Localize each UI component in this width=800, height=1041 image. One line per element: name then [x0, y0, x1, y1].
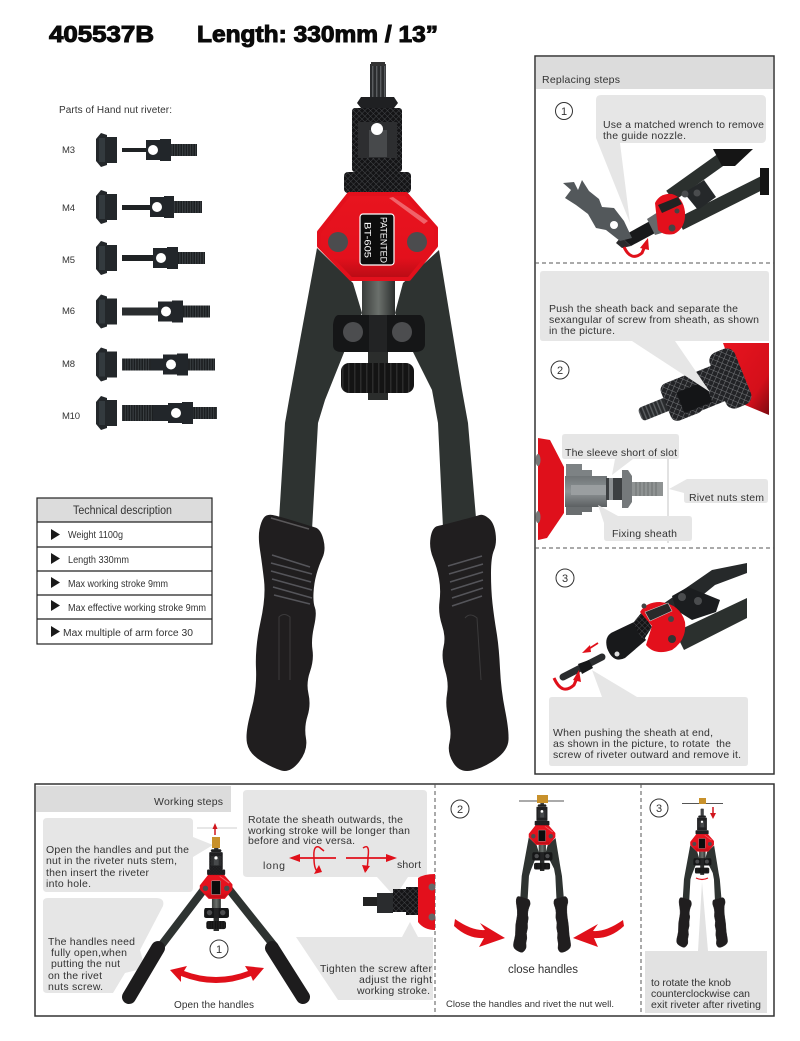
part: M6 — [62, 294, 210, 328]
callout: rotate the sheath: working stroke will be longer than — [247, 825, 410, 837]
callout: open the handles: then insert the riveter — [46, 867, 150, 879]
row: length — [51, 553, 129, 566]
callout: rotate the sheath: short — [397, 859, 421, 871]
illustration: step 3 tool and screw — [554, 563, 747, 689]
part: M4: M4 — [62, 203, 75, 214]
main tool: hand nut riveter: BT-605 — [362, 222, 372, 258]
row: length: Length 330mm — [68, 555, 129, 566]
arrow: short direction — [346, 847, 397, 873]
arrow: stroke line up — [197, 823, 237, 835]
callout: tighten the screw: working stroke. — [356, 985, 430, 997]
illustration: step 1 open riveter — [129, 837, 303, 997]
row: max working stroke: Max working stroke 9mm — [68, 579, 168, 590]
row: max effective working stroke — [51, 600, 206, 614]
illustration: step 2 closed riveter — [513, 795, 571, 952]
step 3 number — [556, 569, 574, 587]
heading: working steps: Working steps — [154, 796, 223, 808]
illustration: step 2 sheath close-up — [629, 343, 769, 443]
callout: tighten the screw — [296, 922, 433, 1000]
step 1 number: 1 — [561, 106, 567, 118]
callout: open the handles: into hole. — [46, 878, 91, 890]
step number 1: 1 — [216, 944, 222, 956]
title: Length: 330mm / 13” — [197, 21, 438, 47]
callout: handles need fully open: nuts screw. — [48, 981, 103, 993]
heading: replacing steps: Replacing steps — [542, 74, 620, 86]
row: max working stroke — [51, 577, 168, 590]
callout: step 3: as shown in the picture, to rotate the — [553, 738, 731, 750]
panel: technical description — [37, 498, 212, 644]
callout: step 3: screw of riveter outward and remove it. — [553, 749, 741, 761]
callout: step 3: When pushing the sheath at end, — [553, 727, 713, 739]
callout: rotate the knob: to rotate the knob — [651, 977, 731, 989]
part: M8 — [62, 348, 215, 382]
callout: step 3 — [549, 670, 748, 766]
main tool: hand nut riveter — [248, 62, 508, 770]
part: M8: M8 — [62, 359, 75, 370]
step 2 number: 2 — [557, 365, 563, 377]
illustration: step 3 riveter — [677, 798, 728, 947]
title: 405537B — [49, 21, 154, 47]
callout: step 2: in the picture. — [549, 325, 615, 337]
step 2 number — [551, 361, 569, 379]
callout: rivet nuts stem — [669, 479, 768, 504]
row: weight: Weight 1100g — [68, 530, 123, 541]
heading: working steps — [36, 786, 231, 812]
callout: fixing sheath — [598, 505, 692, 541]
step 3 number: 3 — [562, 573, 568, 585]
callout: rotate the sheath: long — [263, 860, 285, 872]
arrow: down — [710, 807, 716, 819]
step number 3: 3 — [656, 803, 662, 815]
label: close handles: close handles — [508, 964, 578, 976]
callout: sleeve short of slot: The sleeve short of slot — [565, 447, 677, 459]
callout: tighten the screw: adjust the right — [359, 974, 432, 986]
part: M3 — [62, 133, 197, 167]
step number 1 — [210, 940, 228, 958]
callout: step 2: Push the sheath back and separate the — [549, 303, 738, 315]
main tool: hand nut riveter: PATENTED — [378, 217, 388, 263]
arrow: open the handles — [170, 966, 264, 983]
callout: handles need fully open: on the rivet — [48, 970, 102, 982]
title — [49, 21, 438, 47]
caption: close the handles: Close the handles and rivet the nut well. — [446, 999, 614, 1010]
illustration: sleeve cross-section — [536, 438, 668, 543]
arrow: close right — [573, 920, 624, 947]
panel: working steps — [35, 784, 774, 1016]
step number 2 — [451, 800, 469, 818]
callout: tighten the screw: Tighten the screw after — [320, 963, 432, 975]
step 1 number — [556, 102, 572, 120]
label: open the handles: Open the handles — [174, 1000, 254, 1011]
callout: rotate the sheath — [243, 790, 427, 897]
part: M5 — [62, 241, 205, 275]
callout: rotate the knob: exit riveter after riveting — [651, 999, 761, 1011]
illustration: step 1 tool and wrench — [563, 149, 769, 256]
part: M3: M3 — [62, 145, 75, 156]
heading: technical description: Technical description — [73, 505, 172, 517]
callout: handles need fully open: putting the nut — [51, 958, 120, 970]
panel: parts of hand nut riveter — [59, 105, 217, 430]
callout: handles need fully open: The handles need — [48, 936, 135, 948]
callout: step 2: sexangular of screw from sheath, as shown — [549, 314, 759, 326]
illustration: sheath side view — [363, 874, 436, 930]
heading: parts: Parts of Hand nut riveter: — [59, 105, 172, 116]
heading: replacing steps — [536, 57, 773, 89]
callout: step 1: Use a matched wrench to remove — [603, 119, 764, 131]
callout: step 2 — [540, 271, 769, 392]
callout: fixing sheath: Fixing sheath — [612, 528, 677, 540]
part: M10 — [62, 396, 217, 430]
arrow: long direction — [289, 847, 336, 874]
callout: handles need fully open — [43, 898, 163, 993]
callout: rivet nuts stem: Rivet nuts stem — [689, 492, 764, 504]
part: M10: M10 — [62, 411, 80, 422]
callout: rotate the sheath: before and vice versa. — [248, 835, 355, 847]
panel: replacing steps — [535, 56, 774, 774]
callout: sleeve short of slot — [562, 434, 679, 475]
part: M4 — [62, 190, 202, 224]
callout: rotate the knob: counterclockwise can — [651, 988, 750, 1000]
row: weight — [51, 529, 123, 541]
callout: rotate the sheath: Rotate the sheath outwards, the — [248, 814, 403, 826]
callout: handles need fully open: fully open,when — [51, 947, 127, 959]
step number 2: 2 — [457, 804, 463, 816]
part: M5: M5 — [62, 255, 75, 266]
callout: step 1: the guide nozzle. — [603, 130, 686, 142]
arrow: close left — [454, 919, 505, 947]
callout: rotate the knob — [645, 882, 767, 1013]
step number 3 — [650, 799, 668, 817]
row: max multiple of arm force: Max multiple of arm force 30 — [63, 628, 193, 639]
part: M6: M6 — [62, 306, 75, 317]
callout: step 1 — [596, 95, 766, 223]
callout: open the handles: Open the handles and put the — [46, 844, 189, 856]
callout: open the handles — [43, 818, 213, 892]
callout: open the handles: nut in the riveter nuts stem, — [46, 855, 177, 867]
row: max effective working stroke: Max effective working stroke 9mm — [68, 603, 206, 614]
